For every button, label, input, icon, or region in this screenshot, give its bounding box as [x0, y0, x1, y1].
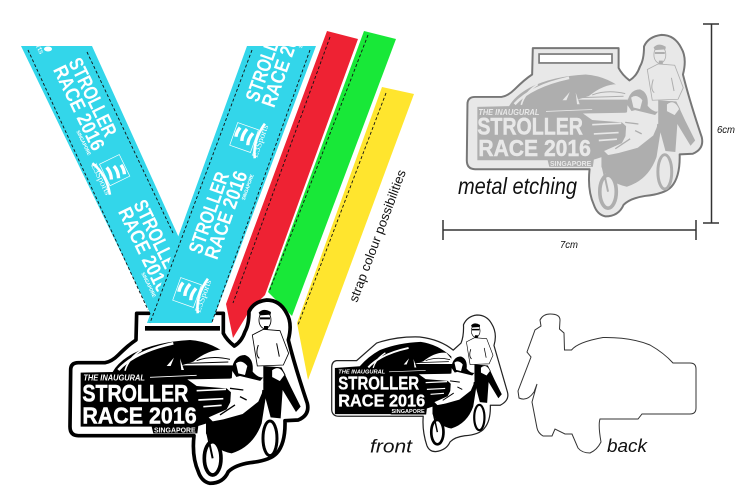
front artwork [335, 323, 502, 444]
main medal front with loop [70, 300, 308, 483]
etched artwork: RACE 2016 [478, 135, 591, 161]
ribbon print: STROLLER [185, 169, 234, 257]
blue neck ribbon left: SINGAPORE [139, 272, 157, 299]
stroller and wheels [204, 390, 277, 475]
etched artwork: SINGAPORE [550, 159, 591, 168]
E3Sports logo: E3Sports [192, 278, 213, 314]
blue neck ribbon left [21, 46, 178, 314]
blue neck ribbon left: STROLLER [129, 197, 186, 283]
7cm label: 7cm [560, 239, 578, 251]
ribbon print [189, 171, 254, 260]
seated woman in stroller [187, 355, 263, 422]
ribbon print: SINGAPORE [241, 173, 256, 201]
medal artwork: THE INAUGURAL [83, 374, 145, 383]
blue neck ribbon right [147, 46, 316, 324]
height dimension 6cm [703, 24, 719, 223]
front caption: front [370, 436, 413, 456]
green colour strap [268, 31, 396, 316]
6cm label: 6cm [717, 124, 735, 136]
ribbon print: RACE 2016 [201, 168, 252, 262]
blue neck ribbon right: RACE 2016 [258, 16, 309, 110]
medal artwork [81, 310, 301, 475]
E3Sports logo [229, 122, 268, 158]
blue neck ribbon right: SINGAPORE [298, 21, 313, 49]
ribbon print: SINGAPORE [74, 130, 92, 157]
front artwork: SINGAPORE [391, 409, 425, 415]
yellow colour strap [297, 87, 414, 380]
front artwork: THE INAUGURAL [338, 369, 386, 375]
standing man [252, 310, 301, 418]
etched artwork: THE INAUGURAL [478, 108, 540, 117]
width dimension 7cm [443, 220, 696, 240]
blue neck ribbon left: E3Sports [23, 20, 47, 55]
ribbon print: STROLLER [64, 55, 121, 141]
ribbon print: RACE 2016 [48, 62, 108, 154]
E3Sports logo [172, 277, 211, 314]
medal artwork: STROLLER [82, 381, 188, 408]
back medal outline [518, 314, 696, 453]
E3Sports logo: E3Sports [89, 161, 113, 196]
E3Sports logo [91, 154, 130, 195]
front artwork: RACE 2016 [338, 390, 425, 410]
etched artwork: STROLLER [477, 114, 583, 141]
medal artwork: RACE 2016 [82, 402, 197, 428]
blue neck ribbon left: RACE 2016 [113, 204, 173, 296]
metal etching caption: metal etching [458, 173, 577, 199]
etched artwork [477, 45, 695, 208]
strap colour label: strap colour possibilities [346, 167, 409, 304]
E3Sports logo: E3Sports [249, 123, 270, 159]
front medal [332, 315, 508, 452]
back caption: back [607, 436, 648, 456]
front artwork: STROLLER [338, 373, 419, 393]
medal artwork: SINGAPORE [154, 426, 196, 435]
metal etching medal [467, 35, 702, 216]
red colour strap [226, 31, 358, 338]
